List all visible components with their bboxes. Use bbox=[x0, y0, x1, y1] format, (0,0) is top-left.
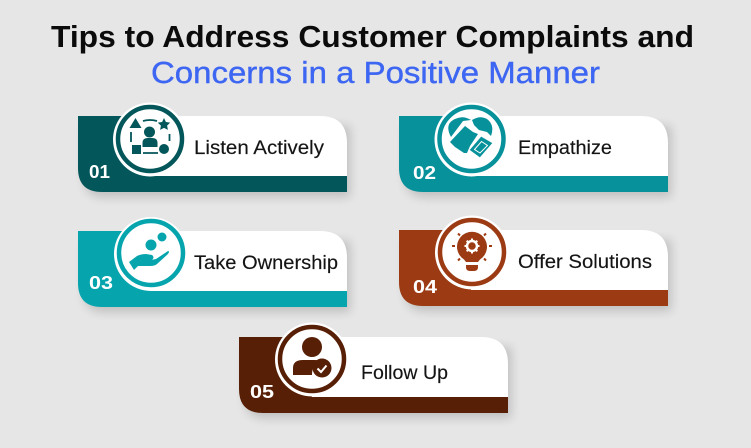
label: Offer Solutions bbox=[518, 252, 652, 273]
icon: hand holding people bbox=[114, 217, 188, 291]
panel: 04 Offer Solutions bbox=[399, 216, 671, 311]
label: Follow Up bbox=[361, 363, 448, 384]
icon: handshake heart bbox=[434, 102, 508, 176]
title: Tips to Address Customer Complaints and bbox=[51, 19, 694, 54]
panel: 05 Follow Up bbox=[239, 322, 511, 418]
label: Take Ownership bbox=[194, 253, 338, 274]
number: 04 bbox=[413, 277, 437, 297]
number: 01 bbox=[89, 162, 110, 182]
label: Listen Actively bbox=[194, 138, 325, 159]
icon: person with check bbox=[275, 322, 349, 396]
icon: light bulb with gear bbox=[435, 216, 509, 290]
icon: team and shapes bbox=[113, 102, 187, 176]
title bbox=[51, 19, 694, 90]
label: Empathize bbox=[518, 138, 612, 159]
panel: 02 Empathize bbox=[399, 102, 671, 197]
number: 03 bbox=[89, 273, 113, 293]
number: 05 bbox=[250, 382, 274, 402]
number: 02 bbox=[413, 163, 436, 183]
panel: 01 Listen Actively bbox=[78, 102, 350, 197]
panel: 03 Take Ownership bbox=[78, 217, 350, 312]
title: Concerns in a Positive Manner bbox=[151, 55, 600, 90]
